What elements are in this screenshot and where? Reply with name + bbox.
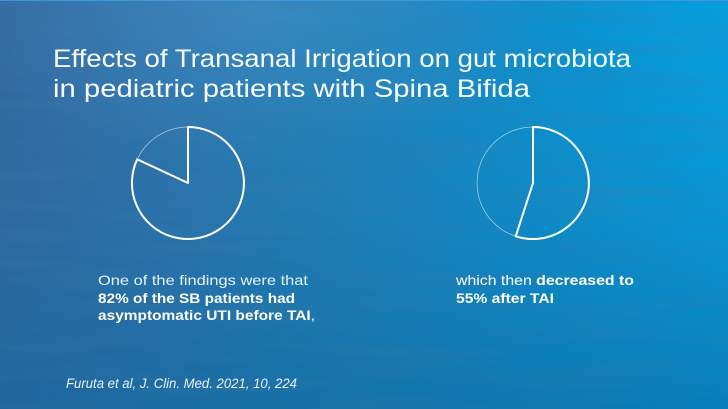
title: Effects of Transanal Irrigation on gut microbiota — [53, 45, 631, 73]
pie chart: 82% before TAI — [132, 127, 244, 239]
text block: finding before TAI — [98, 272, 315, 323]
title: in pediatric patients with Spina Bifida — [53, 75, 530, 103]
text block: finding after TAI: which then decreased to — [455, 272, 634, 288]
pie chart: 55% after TAI — [477, 127, 589, 239]
text block: finding after TAI: 55% after TAI — [456, 290, 554, 306]
citation: Furuta et al, J. Clin. Med. 2021, 10, 224 — [66, 376, 297, 391]
text block: finding before TAI: 82% of the SB patients had — [98, 290, 295, 306]
text block: finding after TAI — [455, 272, 634, 306]
title — [53, 45, 631, 103]
text block: finding before TAI: One of the findings were that — [98, 272, 308, 288]
text block: finding before TAI: asymptomatic UTI before TAI , — [98, 307, 315, 323]
